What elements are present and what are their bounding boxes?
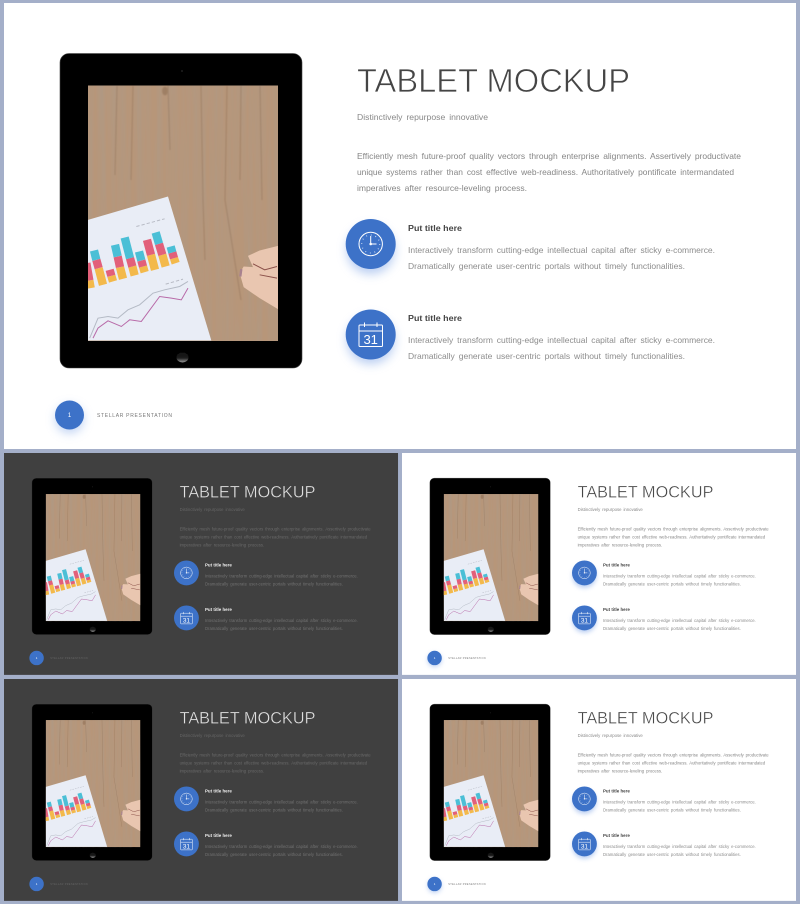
item two: Put title here xyxy=(603,833,630,838)
icon: clock circle xyxy=(572,560,597,588)
icon: clock circle xyxy=(174,560,199,585)
footer label: STELLAR PRESENTATION xyxy=(50,657,88,660)
panel: white slide top right xyxy=(402,453,796,675)
intro paragraph: unique systems rather than cost effective web-readiness. Authoritatively pontificate intermandated xyxy=(180,761,367,766)
item one: Put title here xyxy=(408,223,462,233)
item one xyxy=(603,562,756,586)
intro paragraph xyxy=(180,753,371,774)
page number badge xyxy=(55,400,84,433)
icon: calendar circle xyxy=(346,310,396,364)
item one: Put title here xyxy=(205,788,232,793)
item one: Interactively transform cutting-edge intellectual capital after sticky e-commerce. xyxy=(603,573,756,578)
title: TABLET MOCKUP xyxy=(578,709,713,727)
icon: calendar circle xyxy=(572,831,597,859)
title: TABLET MOCKUP xyxy=(357,62,630,99)
page number badge: 1 xyxy=(36,656,38,660)
icon: calendar circle: 31 xyxy=(581,618,588,625)
item two xyxy=(603,833,756,857)
item one: Put title here xyxy=(205,562,232,567)
item two xyxy=(408,313,715,361)
intro paragraph: Efficiently mesh future-proof quality vectors through enterprise alignments. Assertively productivate xyxy=(180,527,371,532)
intro paragraph xyxy=(578,527,769,548)
page number badge xyxy=(29,651,44,665)
icon: calendar circle xyxy=(174,605,199,630)
intro paragraph: Efficiently mesh future-proof quality vectors through enterprise alignments. Assertively productivate xyxy=(180,753,371,758)
icon: clock circle xyxy=(572,786,597,814)
footer label: STELLAR PRESENTATION xyxy=(448,657,486,660)
panel: white slide bottom right xyxy=(402,679,796,901)
item two: Dramatically generate user-centric portals without timely functionalities. xyxy=(603,852,741,857)
title: TABLET MOCKUP xyxy=(180,709,315,727)
item two xyxy=(205,607,358,631)
item one xyxy=(603,788,756,812)
intro paragraph: Efficiently mesh future-proof quality vectors through enterprise alignments. Assertively productivate xyxy=(357,152,741,161)
item two: Put title here xyxy=(205,607,232,612)
tablet mockup xyxy=(60,54,302,368)
item two: Put title here xyxy=(205,833,232,838)
item one: Put title here xyxy=(603,562,630,567)
page number badge: 1 xyxy=(36,882,38,886)
subtitle: Distinctively repurpose innovative xyxy=(357,113,488,122)
footer label: STELLAR PRESENTATION xyxy=(50,883,88,886)
item two: Put title here xyxy=(603,607,630,612)
intro paragraph: imperatives after resource-leveling process. xyxy=(180,769,264,774)
title: TABLET MOCKUP xyxy=(180,483,315,501)
icon: calendar circle xyxy=(572,605,597,633)
item one: Put title here xyxy=(603,788,630,793)
item two: Dramatically generate user-centric portals without timely functionalities. xyxy=(408,352,685,361)
page number badge xyxy=(427,651,442,667)
item two: Interactively transform cutting-edge intellectual capital after sticky e-commerce. xyxy=(205,844,358,849)
icon: clock circle xyxy=(174,786,199,811)
item two: Interactively transform cutting-edge intellectual capital after sticky e-commerce. xyxy=(205,618,358,623)
footer label: STELLAR PRESENTATION xyxy=(97,413,172,419)
tablet mockup xyxy=(430,704,550,861)
item one: Interactively transform cutting-edge intellectual capital after sticky e-commerce. xyxy=(205,573,358,578)
title: TABLET MOCKUP xyxy=(578,483,713,501)
page number badge xyxy=(427,877,442,893)
subtitle: Distinctively repurpose innovative xyxy=(578,733,644,738)
panel: main white slide xyxy=(4,3,796,449)
item one: Dramatically generate user-centric portals without timely functionalities. xyxy=(603,807,741,812)
item one: Interactively transform cutting-edge intellectual capital after sticky e-commerce. xyxy=(408,246,715,255)
item two xyxy=(205,833,358,857)
item one xyxy=(205,562,358,586)
item two: Put title here xyxy=(408,313,462,323)
item two xyxy=(603,607,756,631)
icon: calendar circle: 31 xyxy=(183,618,190,625)
icon: clock circle xyxy=(346,219,396,274)
page number badge xyxy=(29,877,44,891)
tablet mockup xyxy=(430,478,550,635)
intro paragraph: Efficiently mesh future-proof quality vectors through enterprise alignments. Assertively productivate xyxy=(578,527,769,532)
item two: Interactively transform cutting-edge intellectual capital after sticky e-commerce. xyxy=(603,618,756,623)
icon: calendar circle: 31 xyxy=(183,844,190,851)
icon: calendar circle: 31 xyxy=(581,844,588,851)
intro paragraph xyxy=(357,152,741,193)
item one: Dramatically generate user-centric portals without timely functionalities. xyxy=(205,807,343,812)
subtitle: Distinctively repurpose innovative xyxy=(578,507,644,512)
intro paragraph: unique systems rather than cost effective web-readiness. Authoritatively pontificate intermandated xyxy=(180,535,367,540)
intro paragraph: imperatives after resource-leveling process. xyxy=(180,543,264,548)
intro paragraph: imperatives after resource-leveling process. xyxy=(578,543,662,548)
item one xyxy=(205,788,358,812)
page number badge: 1 xyxy=(434,656,436,660)
item two: Interactively transform cutting-edge intellectual capital after sticky e-commerce. xyxy=(408,336,715,345)
item two: Dramatically generate user-centric portals without timely functionalities. xyxy=(205,626,343,631)
item two: Dramatically generate user-centric portals without timely functionalities. xyxy=(205,852,343,857)
intro paragraph: unique systems rather than cost effective web-readiness. Authoritatively pontificate intermandated xyxy=(578,535,765,540)
icon: calendar circle: 31 xyxy=(363,332,378,347)
tablet mockup xyxy=(32,478,152,635)
intro paragraph: unique systems rather than cost effective web-readiness. Authoritatively pontificate intermandated xyxy=(578,761,765,766)
panel: dark slide top left xyxy=(4,453,398,675)
subtitle: Distinctively repurpose innovative xyxy=(180,507,246,512)
item one: Interactively transform cutting-edge intellectual capital after sticky e-commerce. xyxy=(603,799,756,804)
page number badge: 1 xyxy=(68,413,72,419)
intro paragraph: Efficiently mesh future-proof quality vectors through enterprise alignments. Assertively productivate xyxy=(578,753,769,758)
intro paragraph: imperatives after resource-leveling process. xyxy=(357,184,527,193)
item two: Interactively transform cutting-edge intellectual capital after sticky e-commerce. xyxy=(603,844,756,849)
tablet mockup xyxy=(32,704,152,861)
item two: Dramatically generate user-centric portals without timely functionalities. xyxy=(603,626,741,631)
item one: Dramatically generate user-centric portals without timely functionalities. xyxy=(205,581,343,586)
footer label: STELLAR PRESENTATION xyxy=(448,883,486,886)
item one xyxy=(408,223,715,271)
item one: Interactively transform cutting-edge intellectual capital after sticky e-commerce. xyxy=(205,799,358,804)
item one: Dramatically generate user-centric portals without timely functionalities. xyxy=(603,581,741,586)
panel: dark slide bottom left xyxy=(4,679,398,901)
subtitle: Distinctively repurpose innovative xyxy=(180,733,246,738)
intro paragraph xyxy=(180,527,371,548)
page number badge: 1 xyxy=(434,882,436,886)
icon: calendar circle xyxy=(174,831,199,856)
item one: Dramatically generate user-centric portals without timely functionalities. xyxy=(408,262,685,271)
intro paragraph: unique systems rather than cost effective web-readiness. Authoritatively pontificate intermandated xyxy=(357,168,734,177)
intro paragraph xyxy=(578,753,769,774)
intro paragraph: imperatives after resource-leveling process. xyxy=(578,769,662,774)
